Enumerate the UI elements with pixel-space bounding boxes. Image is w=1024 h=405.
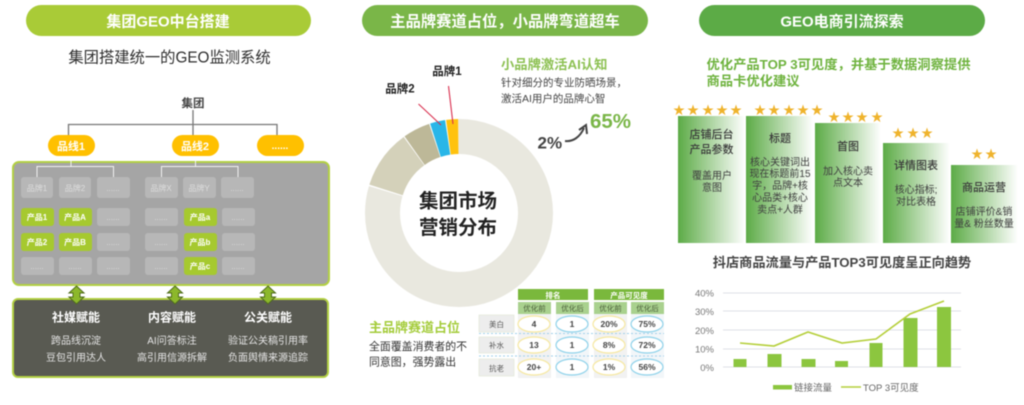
- stair step: store backend parameters: ★: [672, 103, 686, 119]
- table header: 排名: [546, 290, 560, 300]
- table header: 产品可见度: [610, 290, 648, 300]
- enablement: social media: 社媒赋能: [52, 310, 100, 324]
- stair step: title: [746, 103, 824, 243]
- subheading: TOP 3 visibility: 商品卡优化建议: [706, 72, 800, 88]
- product rows: ......: [231, 213, 245, 222]
- heading pill: group GEO platform: 集团GEO中台搭建: [106, 12, 230, 30]
- stair step: title: 核心关键词出: [750, 156, 810, 168]
- product rows: 产品c: [190, 261, 211, 271]
- combo chart: traffic bars and visibility line: [695, 288, 961, 374]
- text block: small brand AI awareness: 针对细分的专业防晒场景，: [501, 76, 627, 89]
- product line pills: 品线2: [181, 139, 209, 153]
- donut chart: group market distribution: [352, 106, 566, 320]
- text block: main brand positioning: 同意图，强势露出: [369, 354, 456, 368]
- stair step: store backend parameters: 店铺后台: [690, 127, 734, 141]
- enablement: public relations: 公关赋能: [244, 310, 292, 324]
- chart legend: 链接流量: [794, 382, 833, 394]
- brand row: 品牌Y: [188, 183, 210, 193]
- table value ellipses: 1: [570, 340, 575, 350]
- table value ellipses: 1: [570, 362, 575, 372]
- brand row: ......: [106, 184, 120, 193]
- enablement: social media: [46, 310, 106, 364]
- stair step: product operations: 商品运营: [962, 180, 1006, 194]
- product rows: 产品A: [64, 212, 86, 222]
- brand callouts: 品牌1: [432, 64, 462, 78]
- table value ellipses: [518, 316, 663, 375]
- y axis labels: 0%: [700, 363, 715, 374]
- enablement: content: [137, 310, 207, 364]
- table header: [518, 289, 664, 314]
- stair step: detail charts: 核心指标;: [895, 183, 937, 196]
- y axis labels: 40%: [695, 288, 715, 300]
- heading pill: brand strategy: 主品牌赛道占位，小品牌弯道超车: [390, 12, 620, 30]
- product rows: ......: [231, 262, 245, 271]
- y axis labels: 10%: [695, 344, 715, 356]
- stair step: main image: 加入核心卖: [823, 164, 873, 178]
- text block: main brand positioning: [369, 320, 467, 368]
- stair step: product operations: ★: [970, 147, 984, 163]
- chart legend: [773, 382, 919, 394]
- stair step: main image: [815, 110, 884, 243]
- stair step: main image: ★: [870, 110, 884, 126]
- table value ellipses: 1: [570, 319, 575, 329]
- chart title: 抖店商品流量与产品TOP3可见度呈正向趋势: [713, 254, 971, 270]
- stair step: title: ★: [782, 103, 796, 119]
- panel: group GEO platform: [13, 5, 329, 377]
- stair step: detail charts: ★: [906, 126, 920, 142]
- stair step: main image: ★: [856, 110, 868, 126]
- product rows: 产品2: [27, 237, 48, 247]
- brand row: [21, 177, 254, 198]
- y axis labels: 30%: [695, 307, 715, 318]
- stair step: product operations: [951, 147, 1018, 243]
- stair step: title: 字，品牌+核: [752, 179, 808, 192]
- org tree top connector: 集团: [182, 96, 204, 110]
- stair step: store backend parameters: ★: [702, 103, 714, 119]
- subtitle: 集团搭建统一的GEO监测系统: [68, 50, 271, 66]
- table value ellipses: 20%: [600, 319, 618, 329]
- heading pill: GEO e-commerce: GEO电商引流探索: [780, 12, 904, 30]
- table value ellipses: 4: [532, 319, 537, 329]
- table value ellipses: 20+: [527, 362, 541, 372]
- enablement: content: AI问答标注: [147, 334, 197, 347]
- table: ranking and product visibility: [479, 289, 664, 378]
- chart legend: TOP 3可见度: [863, 382, 919, 394]
- stair step: title: ★: [810, 103, 824, 119]
- growth stat 2% to 65% with arrow: [538, 110, 631, 152]
- stair step: title: ★: [768, 103, 780, 119]
- stair step: product operations: 量& 粉丝数量: [954, 217, 1014, 230]
- stair step: main image: 首图: [837, 139, 859, 153]
- product rows: ......: [106, 262, 120, 271]
- text block: main brand positioning: 全面覆盖消费者的不: [369, 339, 467, 353]
- product rows: ......: [154, 262, 168, 271]
- brand row: ......: [230, 184, 244, 193]
- stair step: detail charts: [883, 126, 950, 243]
- stair step: store backend parameters: 产品参数: [690, 142, 734, 156]
- text block: small brand AI awareness: 小品牌激活AI认知: [501, 56, 607, 72]
- product rows: ......: [30, 262, 44, 271]
- brand row: 品牌1: [27, 183, 48, 193]
- stair step: detail charts: 对比表格: [896, 195, 936, 208]
- enablement: content: 内容赋能: [148, 310, 196, 324]
- panel: main and small brands: [352, 5, 664, 378]
- table row labels: 抗老: [489, 363, 504, 373]
- text block: main brand positioning: 主品牌赛道占位: [369, 320, 460, 335]
- product rows: ......: [154, 213, 168, 222]
- y axis labels: 20%: [695, 326, 715, 337]
- subheading: TOP 3 visibility: [706, 56, 970, 88]
- stair step: title: ★: [754, 103, 766, 119]
- line: TOP 3 visibility: [740, 301, 944, 346]
- table value ellipses: 13: [529, 340, 539, 350]
- enablement: public relations: 验证公关稿引用率: [228, 334, 308, 347]
- table header: 优化后: [561, 303, 584, 313]
- stair step: title: 心品类+核心: [752, 191, 808, 204]
- heading pill: brand strategy: [362, 5, 648, 36]
- stair step: detail charts: 详情图表: [894, 158, 938, 172]
- product line pills: ......: [272, 141, 289, 152]
- donut center label: [419, 190, 497, 239]
- stair step: detail charts: ★: [892, 126, 904, 142]
- brand row: 品牌2: [65, 183, 86, 193]
- product rows: ......: [154, 238, 168, 247]
- text block: small brand AI awareness: 激活AI用户的品牌心智: [501, 92, 605, 105]
- heading pill: group GEO platform: [26, 5, 311, 36]
- brand callouts: 品牌2: [385, 82, 415, 96]
- stair step: store backend parameters: ★: [686, 103, 700, 119]
- enablement: social media: 豆包引用达人: [46, 351, 106, 364]
- product rows: [21, 208, 255, 275]
- table value ellipses: 72%: [638, 340, 656, 350]
- table row labels: 美白: [489, 319, 504, 329]
- stair step: title: 卖点+人群: [757, 203, 803, 216]
- table value ellipses: 1%: [603, 362, 616, 372]
- stair step: title: 现在标题前15: [749, 167, 811, 180]
- product rows: 产品b: [190, 237, 211, 247]
- growth stat 2% to 65% with arrow: 65%: [590, 110, 631, 133]
- product rows: ......: [231, 238, 245, 247]
- product rows: 产品1: [27, 212, 48, 222]
- brand callouts: [385, 64, 462, 125]
- dark enablement panel: [13, 299, 328, 377]
- subheading: TOP 3 visibility: 优化产品TOP 3可见度，并基于数据洞察提供: [706, 56, 970, 72]
- table header: 优化后: [636, 303, 659, 313]
- bars: link traffic: [734, 307, 951, 367]
- stair step: store backend parameters: 意图: [702, 181, 722, 194]
- y axis labels: [695, 288, 715, 374]
- double arrows between panels: [69, 286, 276, 304]
- table row labels: 补水: [489, 340, 504, 350]
- text block: small brand AI awareness: [501, 56, 627, 105]
- table header: 优化前: [599, 303, 622, 313]
- table header: 优化前: [523, 303, 546, 313]
- stair step: main image: ★: [842, 110, 854, 126]
- stair step: title: 标题: [769, 132, 791, 145]
- growth stat 2% to 65% with arrow: 2%: [538, 134, 562, 152]
- product rows: ......: [106, 213, 120, 222]
- gray brand and product matrix panel: [13, 161, 329, 285]
- stair step: main image: ★: [828, 110, 840, 126]
- product line pills: 品线1: [57, 139, 85, 153]
- stair step: store backend parameters: 覆盖用户: [692, 169, 732, 182]
- table row labels: [479, 315, 514, 376]
- enablement: social media: 跨品线沉淀: [51, 334, 101, 347]
- product rows: 产品B: [64, 237, 86, 247]
- product rows: 产品a: [190, 212, 211, 222]
- enablement: content: 高引用信源拆解: [137, 351, 207, 364]
- stair step: store backend parameters: ★: [730, 103, 742, 119]
- enablement: public relations: 负面舆情来源追踪: [228, 351, 308, 364]
- panel: GEO e-commerce: [672, 5, 1018, 394]
- heading pill: GEO e-commerce: [699, 5, 985, 36]
- stair step: store backend parameters: [672, 103, 745, 243]
- table value ellipses: 8%: [603, 340, 616, 350]
- stair step: store backend parameters: ★: [716, 103, 728, 119]
- stair step: title: ★: [796, 103, 810, 119]
- stair step: product operations: ★: [984, 147, 998, 163]
- stair step: main image: 点文本: [833, 176, 863, 189]
- stair step: product operations: 店铺评价&销: [956, 205, 1012, 218]
- brand row: 品牌X: [150, 183, 172, 193]
- donut center label: 集团市场: [419, 190, 497, 212]
- stair step: detail charts: ★: [920, 126, 934, 142]
- product line pills: [48, 135, 304, 156]
- product rows: ......: [106, 238, 120, 247]
- table value ellipses: 56%: [638, 362, 656, 372]
- org tree top connector: [68, 96, 277, 135]
- enablement: public relations: [228, 310, 308, 364]
- product rows: ......: [68, 262, 82, 271]
- donut center label: 营销分布: [419, 217, 497, 239]
- table value ellipses: 75%: [638, 319, 656, 329]
